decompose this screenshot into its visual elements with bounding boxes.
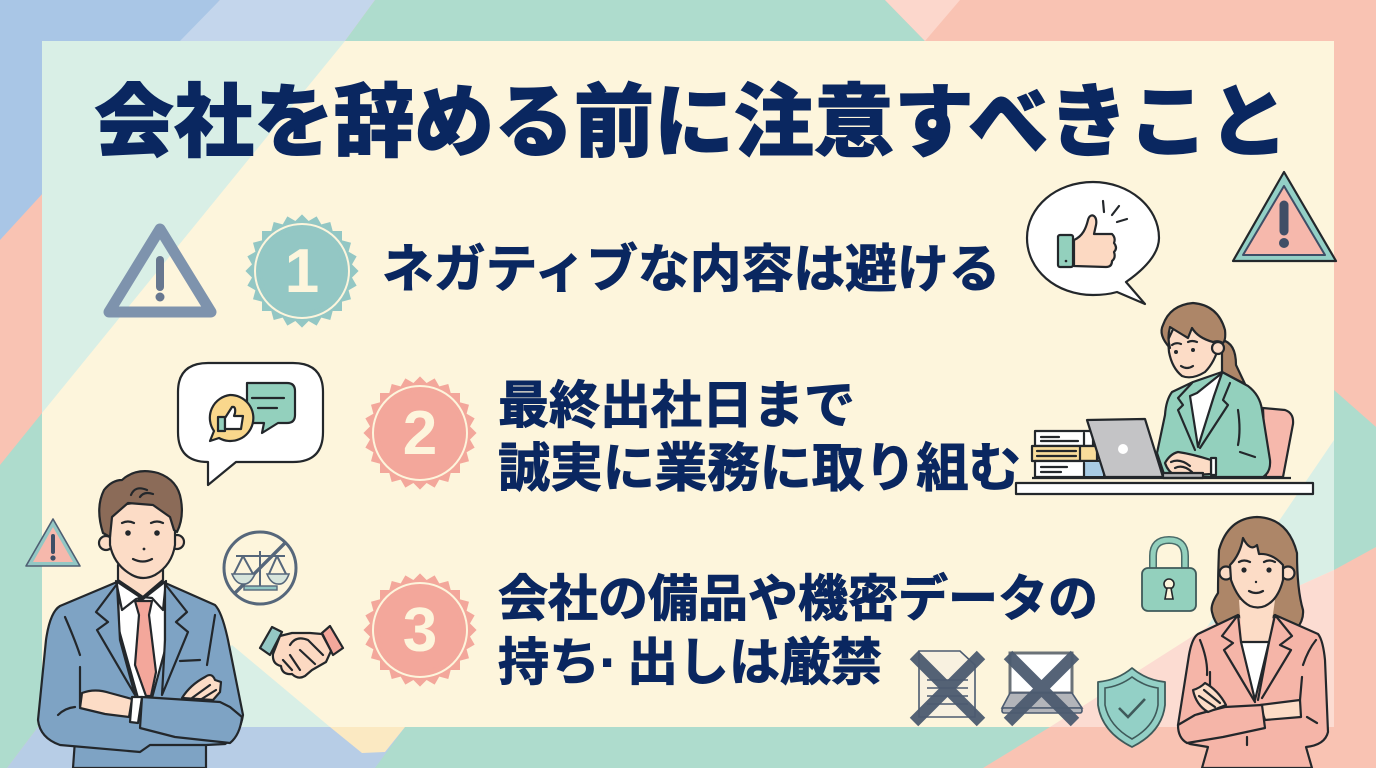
ears [1220, 566, 1232, 580]
cuff [130, 697, 142, 723]
hand [1165, 452, 1211, 476]
neck [118, 565, 163, 597]
forearm [1260, 700, 1301, 720]
laptop [1087, 419, 1163, 477]
item 3 text [498, 571, 1098, 691]
icon: crossed-out scales [224, 532, 296, 604]
woman working at laptop [1016, 303, 1313, 494]
number badge 3 [363, 573, 477, 687]
ears [99, 536, 113, 550]
tie [135, 601, 156, 696]
icon: shield with check [1098, 668, 1165, 747]
item 3 text: 持ち·出しは厳禁 [498, 634, 882, 691]
desk [1032, 477, 1291, 479]
collar [116, 581, 166, 610]
lower body [73, 740, 206, 768]
hair [1162, 303, 1225, 348]
number badge 1 [245, 214, 359, 328]
hair [1212, 517, 1303, 630]
warning icon: grey triangle [109, 229, 211, 312]
small warning icon [26, 519, 80, 566]
warning icon: mint and pink triangle [1233, 172, 1336, 261]
lapels [1178, 383, 1255, 457]
hair [99, 471, 182, 537]
books [1035, 431, 1093, 446]
speech bubble: chat and like [178, 363, 323, 485]
shirt [1241, 642, 1269, 700]
shirt [1190, 373, 1222, 447]
speech bubble: thumbs up [1027, 182, 1159, 304]
item 3 text: 会社の備品や機密データの [498, 571, 1098, 627]
neck skin [1239, 600, 1275, 642]
shirt [118, 585, 165, 698]
face [1168, 322, 1222, 377]
hand [182, 675, 221, 700]
lower arm [1247, 717, 1317, 745]
number badge 2 [363, 376, 477, 490]
icon: crossed-out laptop [1002, 653, 1082, 722]
number badge 1: 1 [285, 237, 319, 306]
icon: handshake [260, 626, 343, 678]
item 2 text: 最終出社日まで [498, 377, 855, 434]
item 1 text: ネガティブな内容は避ける [382, 240, 1000, 298]
lapels [96, 584, 135, 695]
item 2 text [498, 377, 1021, 498]
chair [1263, 408, 1293, 477]
number badge 3: 3 [403, 596, 437, 665]
lapels [1200, 615, 1316, 702]
man with folded arms [38, 471, 243, 768]
face details [125, 530, 131, 536]
icon: crossed-out document [914, 651, 981, 722]
woman with folded arms [1178, 517, 1328, 768]
forearm [80, 690, 132, 717]
jacket [1178, 615, 1328, 768]
sleeve [1178, 705, 1265, 743]
face details [1174, 350, 1178, 354]
item 2 text: 誠実に業務に取り組む [498, 440, 1021, 498]
hand [1193, 683, 1226, 712]
title: 会社を辞める前に注意すべきこと [94, 78, 1288, 167]
number badge 2: 2 [403, 399, 437, 468]
face [110, 502, 175, 578]
face details [1241, 567, 1247, 573]
sleeve [140, 697, 242, 743]
sleeve cuff [1211, 458, 1216, 475]
icon: padlock [1142, 540, 1196, 611]
jacket [38, 582, 243, 752]
ponytail [1222, 340, 1245, 384]
jacket [1157, 372, 1270, 477]
face [1230, 538, 1283, 608]
